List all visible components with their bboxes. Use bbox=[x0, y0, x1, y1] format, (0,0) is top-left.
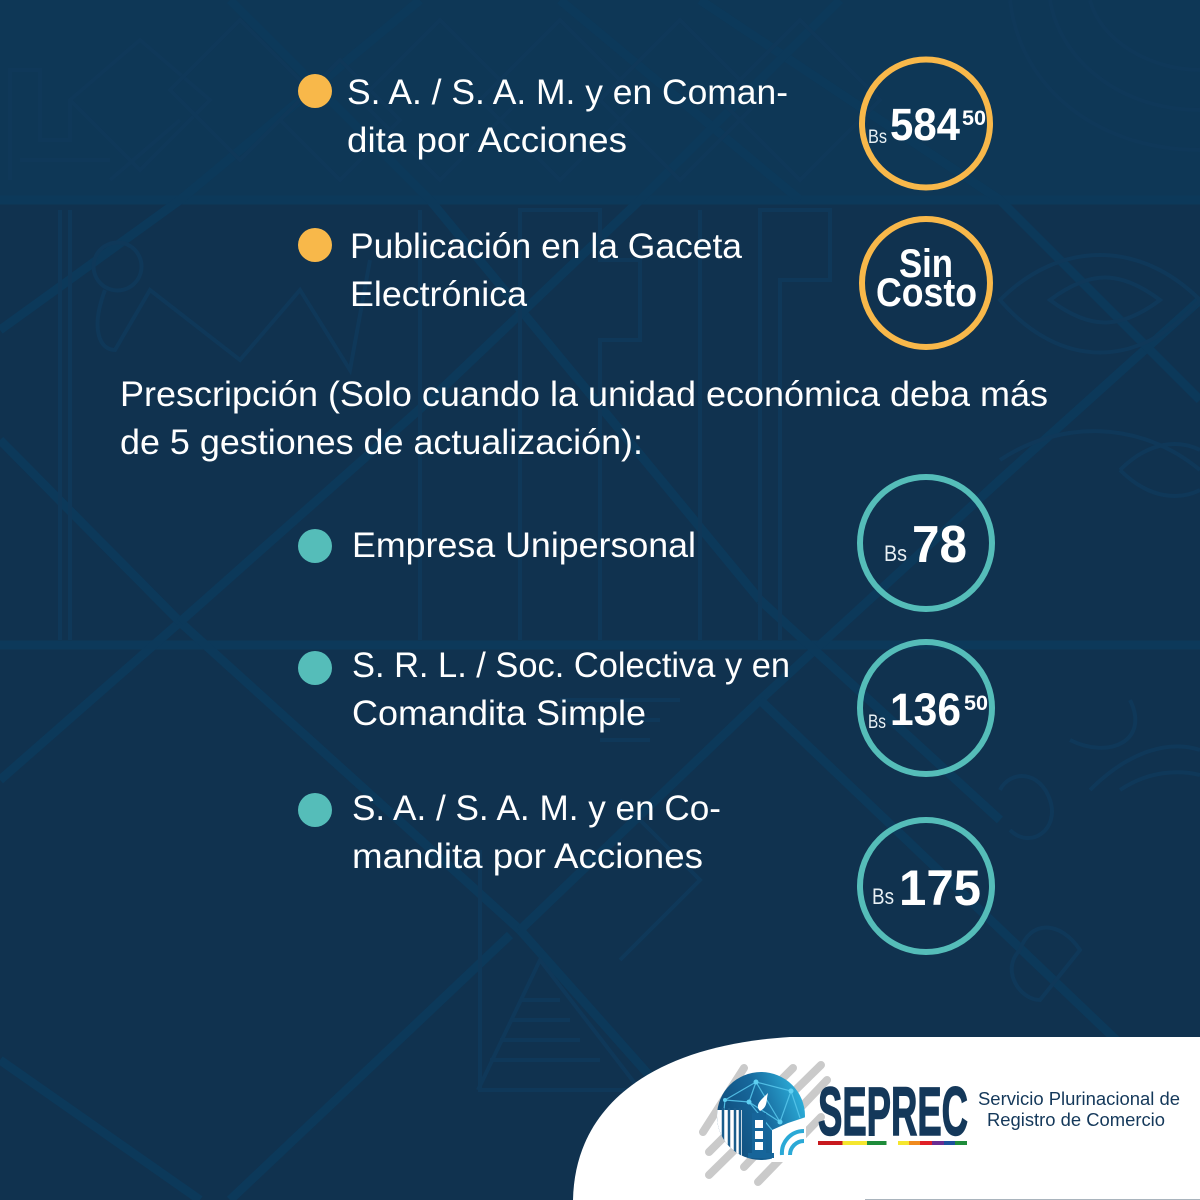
badge sin costo: Costo bbox=[876, 271, 977, 315]
item text: mandita por Acciones bbox=[352, 837, 703, 876]
icon: globe with stripes bbox=[703, 1065, 827, 1182]
price badge 175: Bs bbox=[872, 884, 894, 909]
item text: Electrónica bbox=[350, 275, 528, 314]
item: gaceta bbox=[298, 227, 743, 314]
footer shadow line bbox=[865, 1199, 1200, 1200]
item text: Publicación en la Gaceta bbox=[350, 227, 743, 266]
price badge 136,50: Bs bbox=[868, 712, 886, 733]
bullet teal bbox=[298, 793, 332, 827]
price badge 175: 175 bbox=[899, 860, 981, 916]
heading: prescripción: Prescripción (Solo cuando la unidad económica deba más bbox=[120, 375, 1048, 414]
SEPREC logo bbox=[703, 1065, 1180, 1182]
item text: dita por Acciones bbox=[347, 121, 627, 160]
item: S.A. publicación bbox=[298, 73, 788, 160]
price badge 78 bbox=[860, 477, 992, 609]
price badge 136,50: 136 bbox=[890, 684, 961, 735]
tagline: Servicio Plurinacional de bbox=[978, 1089, 1180, 1109]
item text: S. A. / S. A. M. y en Co- bbox=[352, 789, 721, 828]
bullet teal bbox=[298, 651, 332, 685]
wordmark SEPREC: SEPREC bbox=[818, 1073, 968, 1150]
price badge 584,50: Bs bbox=[868, 127, 887, 148]
badge sin costo: Sin bbox=[899, 242, 953, 286]
price badge 136,50 bbox=[860, 642, 992, 774]
price badge 584,50: 584 bbox=[890, 99, 960, 150]
tagline: Registro de Comercio bbox=[987, 1110, 1165, 1130]
bullet orange bbox=[298, 228, 332, 262]
item: empresa unipersonal bbox=[298, 526, 696, 565]
price badge 78: Bs bbox=[884, 541, 907, 566]
item text: Empresa Unipersonal bbox=[352, 526, 696, 565]
heading: prescripción: de 5 gestiones de actualización): bbox=[120, 423, 643, 462]
item text: S. A. / S. A. M. y en Coman- bbox=[347, 73, 788, 112]
bullet teal bbox=[298, 529, 332, 563]
bullet orange bbox=[298, 74, 332, 108]
price badge 78: 78 bbox=[912, 516, 967, 574]
item text: Comandita Simple bbox=[352, 694, 646, 733]
item: S.R.L. bbox=[298, 646, 790, 733]
price badge 175 bbox=[860, 820, 992, 952]
price badge 136,50: 50 bbox=[964, 692, 988, 715]
price badge 584,50 bbox=[862, 60, 990, 188]
flag stripes bbox=[818, 1141, 967, 1145]
item: S.A. prescripción bbox=[298, 789, 721, 876]
badge sin costo bbox=[862, 219, 990, 347]
price badge 584,50: 50 bbox=[962, 107, 986, 130]
item text: S. R. L. / Soc. Colectiva y en bbox=[352, 646, 790, 685]
white footer panel bbox=[573, 1037, 1200, 1200]
